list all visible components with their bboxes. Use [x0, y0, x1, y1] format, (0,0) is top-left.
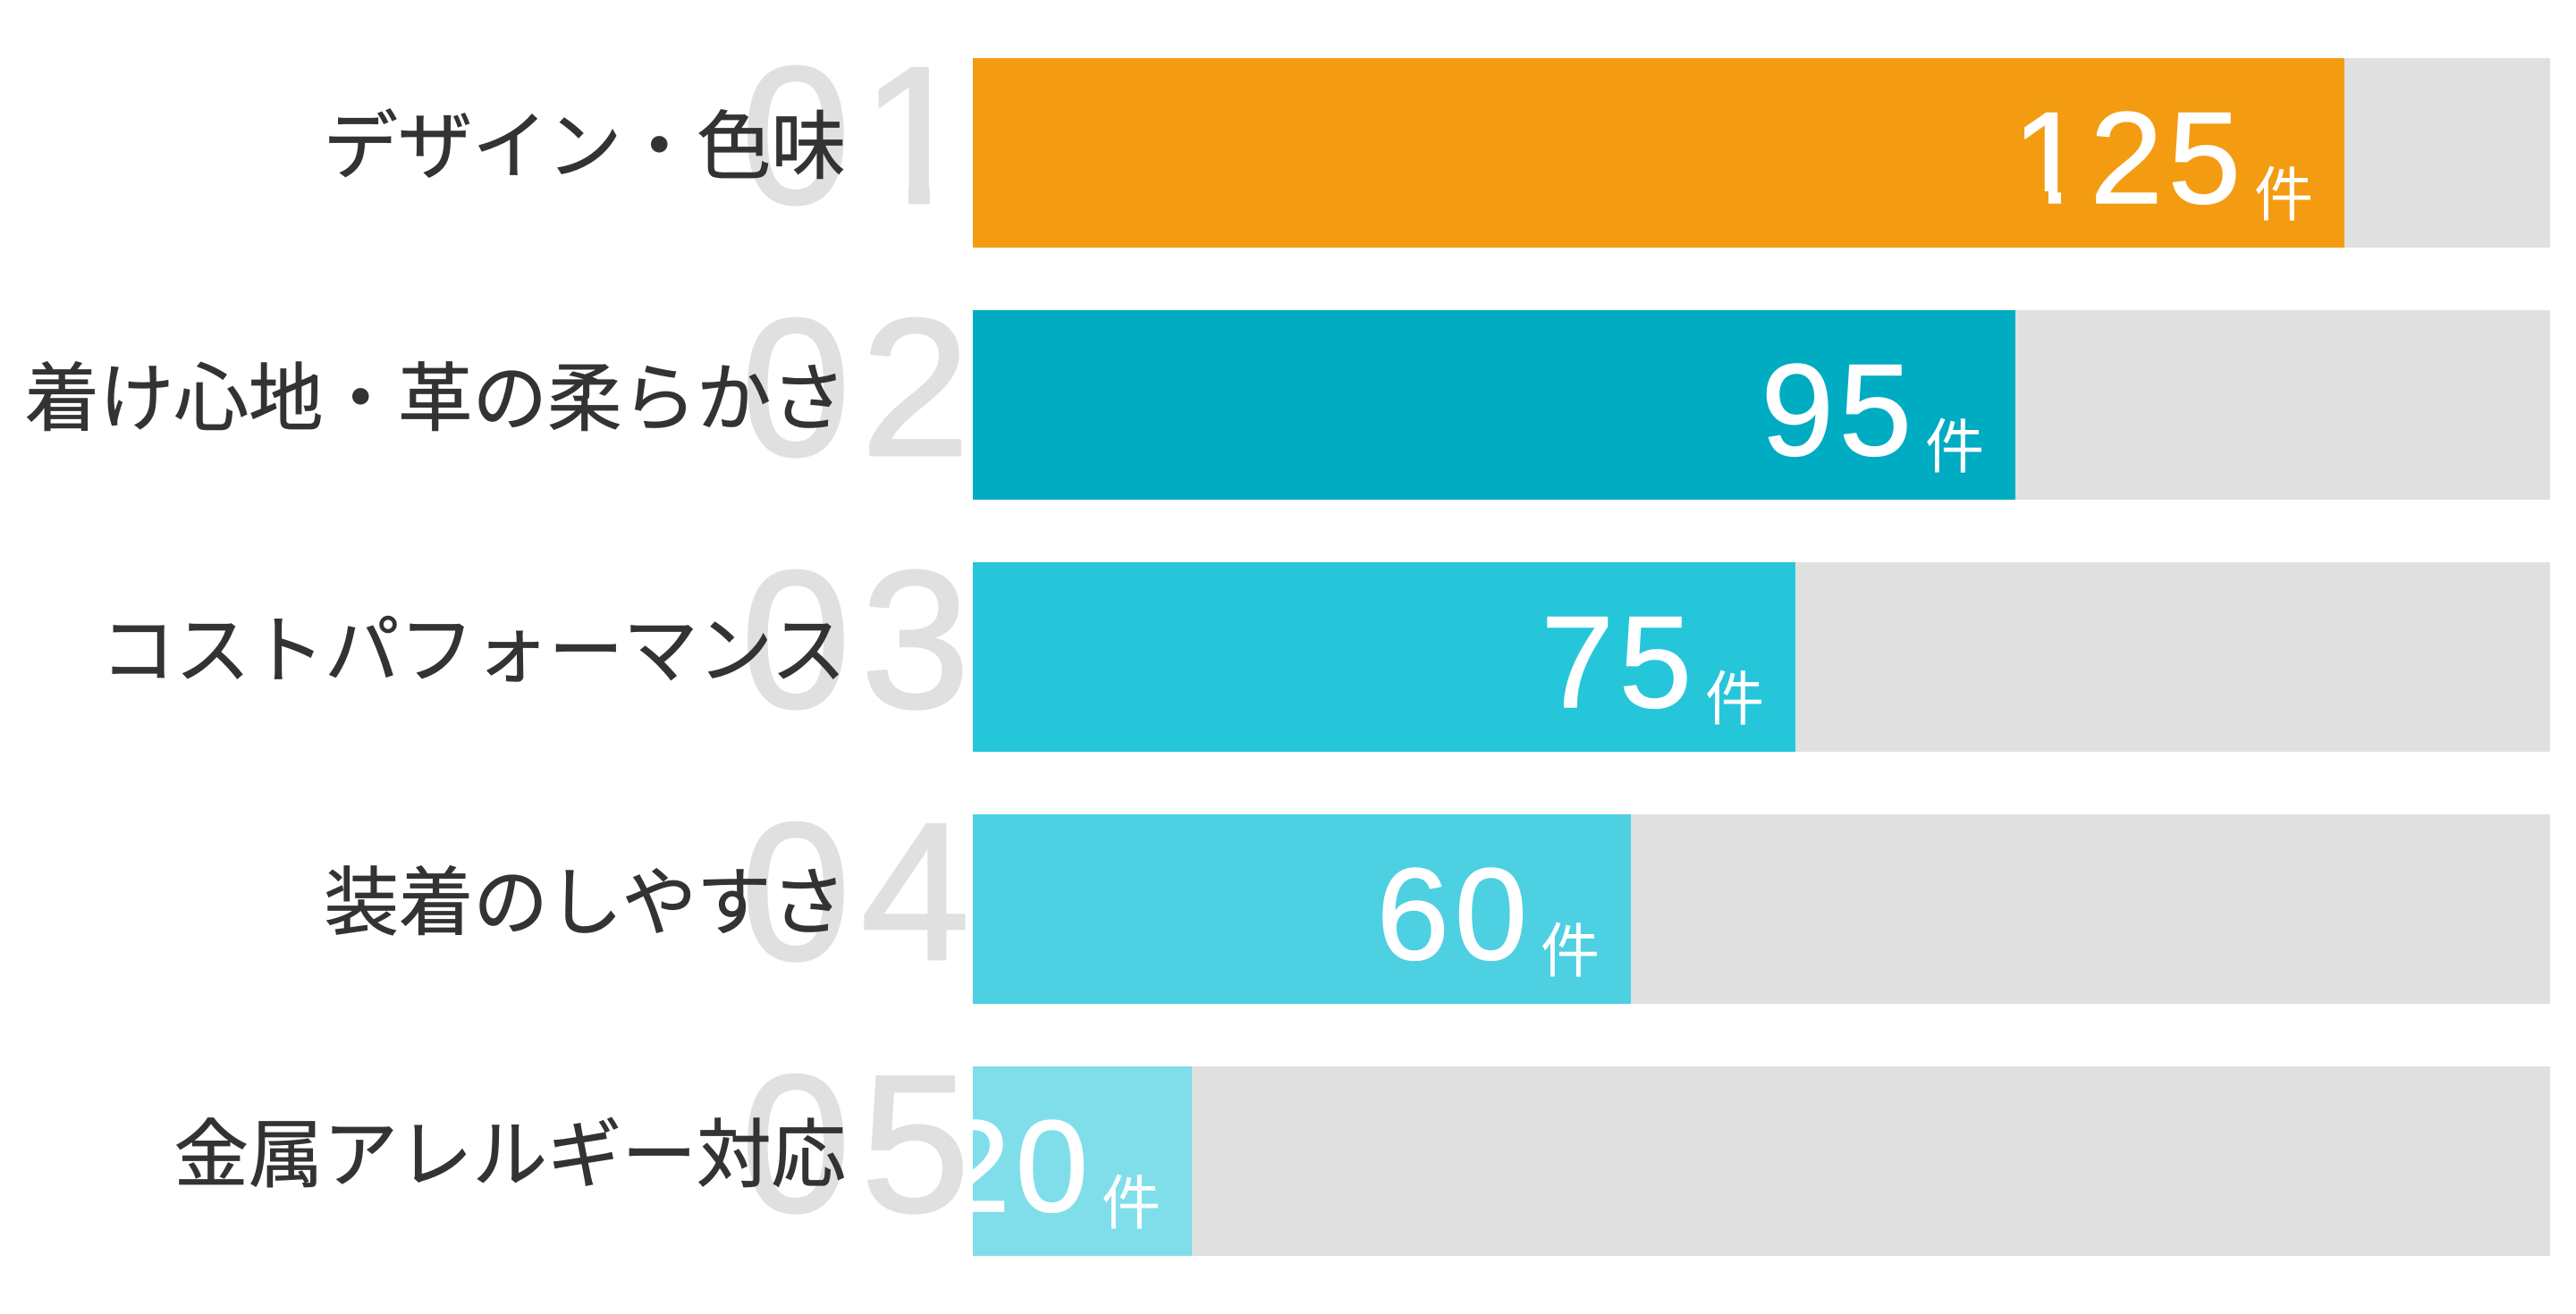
value 60件: 60: [1377, 841, 1533, 987]
label: デザイン・色味: [324, 105, 846, 189]
value 60件: [1382, 867, 1597, 977]
bar track: [973, 310, 2550, 500]
label: 着け心地・革の柔らかさ: [25, 357, 846, 441]
bar value: [973, 310, 2015, 500]
value 125件: 1: [2013, 85, 2090, 231]
value 95件: 95: [1761, 337, 1917, 483]
bar value: [973, 562, 1795, 752]
value 95件: [1767, 363, 1981, 473]
rank number 02: 02: [741, 279, 981, 497]
value 60件: 件: [1541, 918, 1600, 984]
row 3: コストパフォーマンス: [113, 562, 2550, 752]
row 1: デザイン・色味: [329, 58, 2550, 248]
bar track: [973, 58, 2550, 248]
label: コストパフォーマンス: [101, 609, 846, 693]
value 125件: 件: [2254, 162, 2313, 228]
value 125件: [2024, 111, 2310, 221]
row 4: 装着のしやすさ: [325, 814, 2550, 1004]
value 20件: 件: [1102, 1170, 1161, 1236]
bar value: [973, 58, 2344, 248]
rank number 04: 04: [741, 783, 981, 1001]
rank number 03: 03: [741, 531, 981, 749]
bar track: [973, 814, 2550, 1004]
bar track: [973, 562, 2550, 752]
row 2: 着け心地・革の柔らかさ: [27, 310, 2550, 500]
value 75件: [1547, 617, 1761, 725]
bar track: [973, 1066, 2550, 1256]
value 20件: [973, 1119, 1158, 1229]
value 125件: 25: [2090, 85, 2246, 231]
value 95件: 件: [1925, 414, 1984, 480]
label: 金属アレルギー対応: [173, 1113, 846, 1197]
bar value: [973, 1066, 1192, 1256]
value 20件: 20: [938, 1093, 1094, 1239]
rank number 05: 05: [741, 1035, 981, 1253]
rank number 01: 0: [741, 27, 861, 245]
rank number 01: [747, 64, 930, 206]
value 75件: 件: [1705, 666, 1764, 732]
row 5: 金属アレルギー対応: [176, 1066, 2550, 1256]
bar value: [973, 814, 1631, 1004]
value 75件: 75: [1541, 589, 1697, 735]
rank number 01: 1: [861, 27, 981, 245]
label: 装着のしやすさ: [324, 861, 846, 945]
